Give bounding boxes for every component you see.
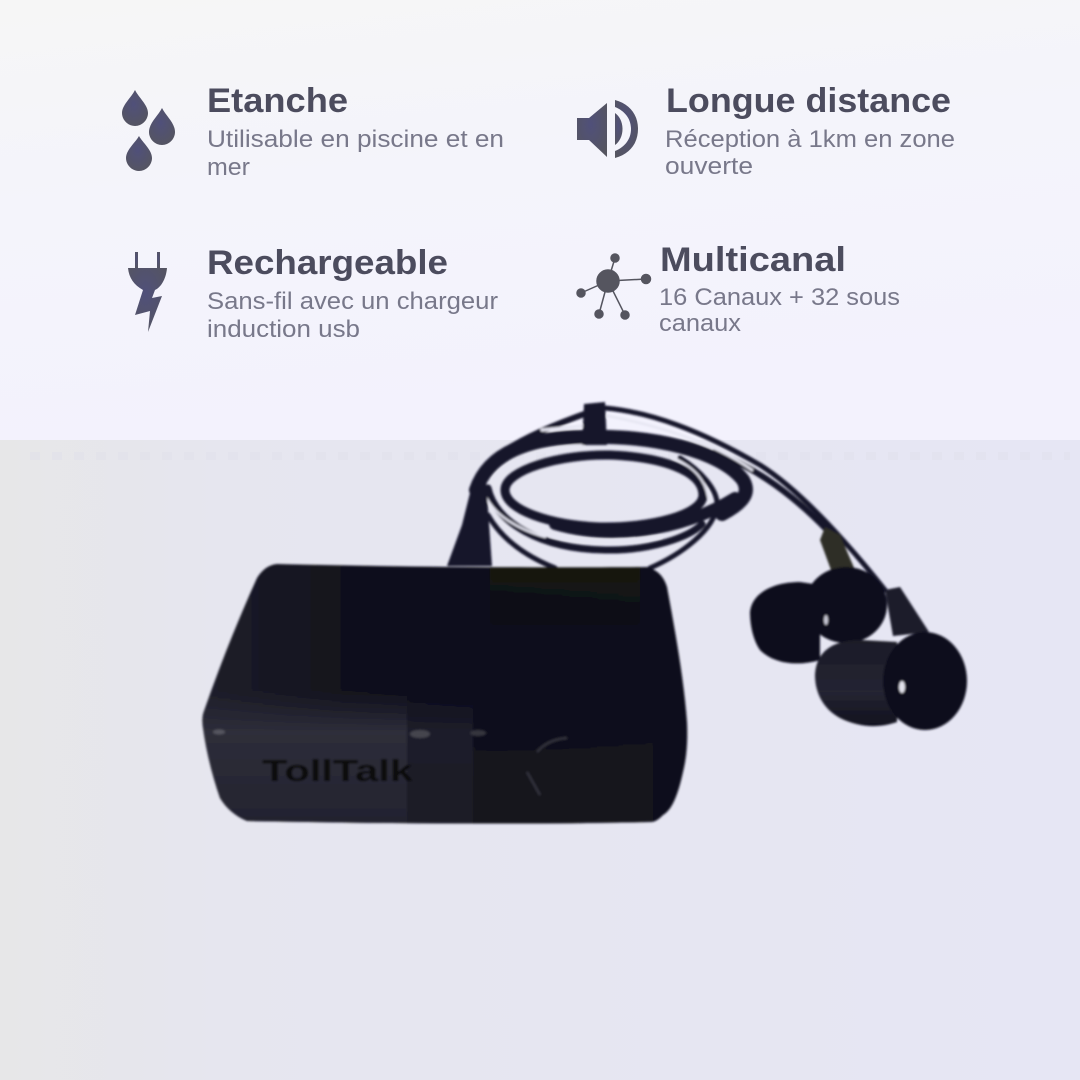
description: canaux: [659, 310, 741, 337]
icon: speaker: [577, 100, 638, 158]
description: ouverte: [665, 153, 753, 180]
cables: [473, 408, 885, 590]
cable clip: [582, 402, 607, 445]
device front face: [195, 690, 407, 830]
device box: [195, 564, 687, 830]
feature: Longue distance: [577, 82, 955, 180]
description: [207, 288, 498, 343]
product: receiver with earphones: [195, 402, 967, 830]
description: mer: [207, 154, 250, 181]
cable connector: [447, 480, 492, 566]
cable highlights: [484, 416, 752, 541]
description: [659, 284, 900, 337]
heading: Longue distance: [666, 82, 951, 120]
heading: Multicanal: [660, 241, 846, 279]
heading: Rechargeable: [207, 244, 448, 282]
feature: Etanche: [122, 82, 504, 181]
icon: network nodes: [577, 254, 650, 319]
description: Sans-fil avec un chargeur: [207, 288, 498, 315]
icon: water drops: [122, 90, 175, 171]
description: [665, 126, 955, 180]
earbud: rear: [750, 527, 887, 663]
panel: bottom background: [0, 440, 1080, 1080]
description: Utilisable en piscine et en: [207, 126, 504, 153]
panel: top background: [0, 0, 1080, 440]
description: 16 Canaux + 32 sous: [659, 284, 900, 311]
description: [207, 126, 504, 181]
device button: [527, 738, 567, 795]
feature: Rechargeable: [128, 244, 498, 343]
heading: Etanche: [207, 82, 348, 120]
feature: Multicanal: [577, 241, 900, 337]
earbud: front: [815, 587, 967, 730]
description: Réception à 1km en zone: [665, 126, 955, 153]
description: induction usb: [207, 316, 360, 343]
device brand label: TollTalk: [262, 753, 414, 788]
icon: plug with lightning: [128, 252, 167, 332]
device highlights: [213, 730, 225, 734]
